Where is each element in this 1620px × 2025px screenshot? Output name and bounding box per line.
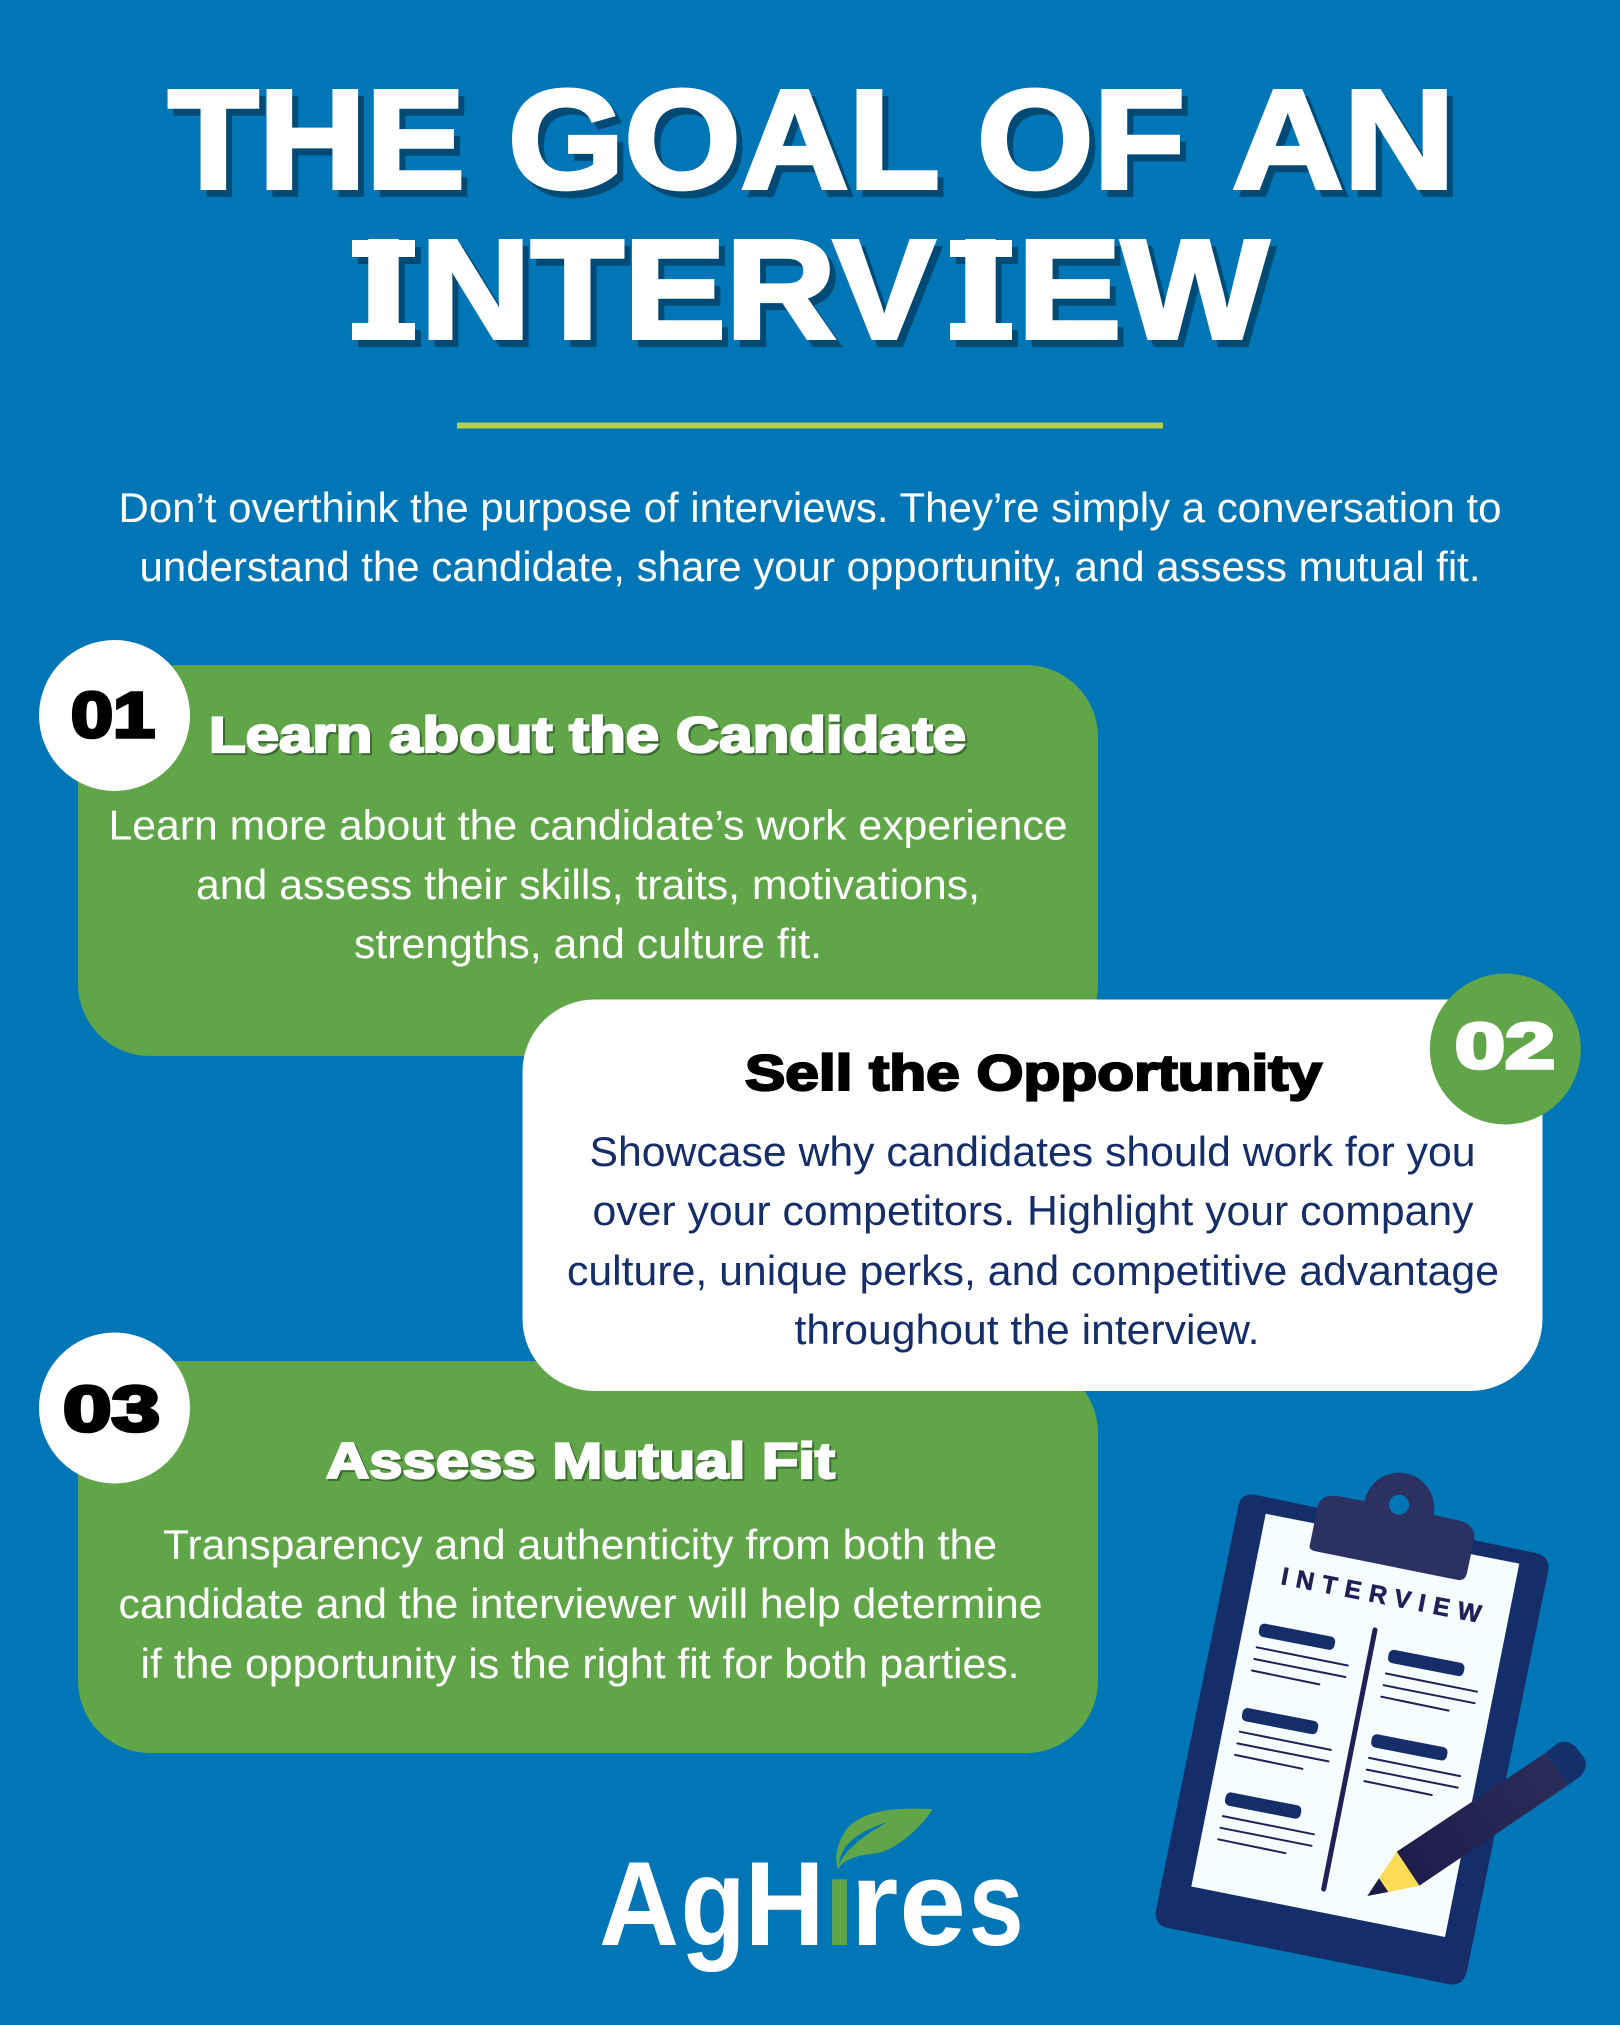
body text: learn about the candidate xyxy=(108,802,1068,967)
logo wordmark: e xyxy=(899,1835,966,1971)
title: EW xyxy=(1018,210,1268,368)
intro text: Don’t overthink the purpose of interviews. They’re simply a conversation to xyxy=(118,484,1502,531)
title: NTERV xyxy=(420,210,935,368)
title xyxy=(168,60,1455,368)
badge: 02 xyxy=(1430,974,1581,1124)
logo wordmark: H xyxy=(745,1837,825,1971)
body text: learn about the candidate: Learn more about the candidate’s work experience xyxy=(108,802,1068,848)
form title: INTERVIEW xyxy=(1279,1562,1484,1629)
logo wordmark: r xyxy=(850,1835,898,1971)
logo wordmark: g xyxy=(681,1831,746,1972)
logo wordmark: ı xyxy=(824,1834,854,1972)
logo wordmark: A xyxy=(599,1837,679,1971)
form text blocks xyxy=(1218,1623,1477,1853)
intro text xyxy=(118,484,1502,590)
form column divider xyxy=(1324,1630,1375,1889)
pencil xyxy=(1367,1742,1586,1896)
clip xyxy=(1310,1473,1474,1580)
logo wordmark: s xyxy=(969,1835,1024,1971)
title: OF xyxy=(977,60,1185,218)
body text: sell the opportunity xyxy=(567,1128,1499,1353)
title: AN xyxy=(1232,60,1455,218)
body text: assess mutual fit: candidate and the interviewer will help determine xyxy=(118,1580,1042,1627)
panel: sell the opportunity xyxy=(522,1000,1542,1391)
body text: sell the opportunity: over your competitors. Highlight your company xyxy=(592,1187,1474,1234)
body text: sell the opportunity: culture, unique perks, and competitive advantage xyxy=(567,1247,1499,1294)
body text: sell the opportunity: Showcase why candidates should work for you xyxy=(590,1128,1476,1175)
badge: 02: 02 xyxy=(1455,1010,1555,1082)
heading: sell the opportunity: Sell the Opportunity xyxy=(745,1045,1322,1101)
paper sheet xyxy=(1191,1514,1519,1937)
title: I xyxy=(956,210,1005,368)
body text: assess mutual fit xyxy=(118,1521,1042,1687)
body text: learn about the candidate: and assess their skills, traits, motivations, xyxy=(196,861,980,908)
icon: leaf xyxy=(836,1809,933,1869)
badge: 01: 01 xyxy=(71,679,155,751)
logo: AgHires xyxy=(599,1809,1024,1972)
title: I xyxy=(359,210,408,368)
title: GOAL xyxy=(508,60,940,218)
body text: learn about the candidate: strengths, and culture fit. xyxy=(354,920,822,967)
clipboard board xyxy=(1156,1495,1548,1984)
panel: learn about the candidate xyxy=(78,665,1098,1056)
badge: 03: 03 xyxy=(63,1373,160,1445)
badge: 03 xyxy=(39,1332,190,1484)
heading: learn about the candidate: Learn about the Candidate xyxy=(209,707,966,763)
body text: assess mutual fit: if the opportunity is the right fit for both parties. xyxy=(140,1640,1019,1687)
badge: 01 xyxy=(39,640,190,791)
body text: assess mutual fit: Transparency and authenticity from both the xyxy=(163,1521,997,1568)
body text: sell the opportunity: throughout the interview. xyxy=(794,1306,1260,1353)
icon: clipboard with interview form xyxy=(1156,1473,1586,1984)
panel: assess mutual fit xyxy=(78,1361,1098,1753)
title: THE xyxy=(168,60,465,218)
intro text: understand the candidate, share your opportunity, and assess mutual fit. xyxy=(140,543,1480,590)
heading: assess mutual fit: Assess Mutual Fit xyxy=(326,1433,835,1489)
logo wordmark xyxy=(599,1831,1024,1972)
